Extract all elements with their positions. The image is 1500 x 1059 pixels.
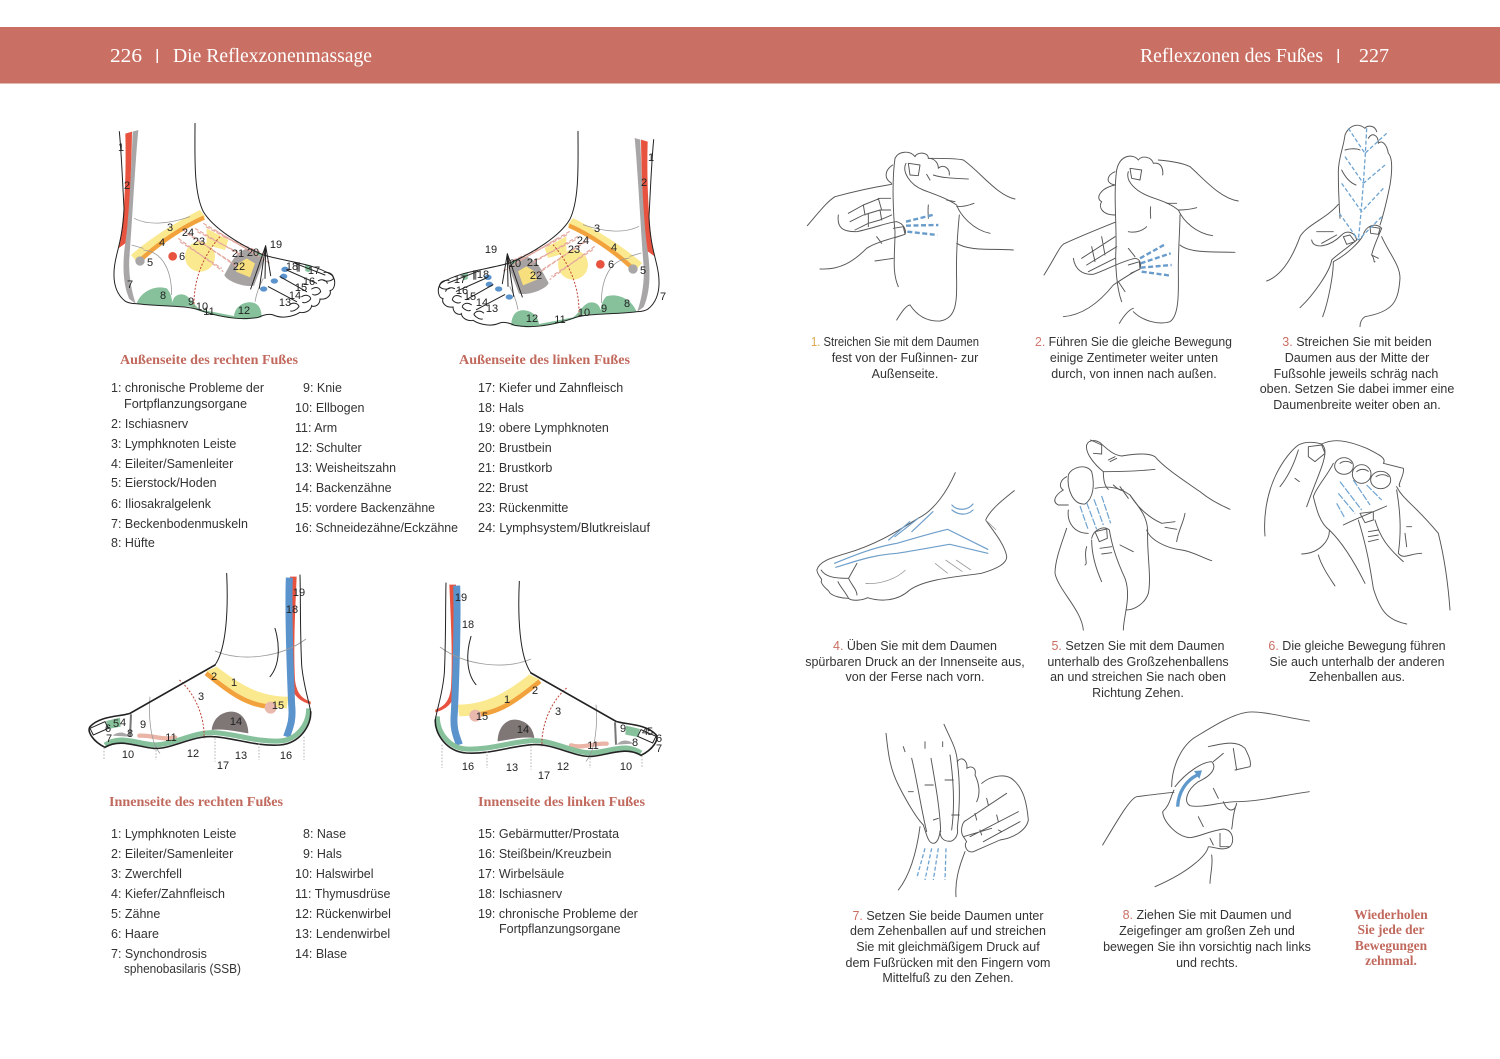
right page number: 227 [1359, 46, 1389, 67]
legend column 1, inner side: 7: Synchondrosis [111, 947, 207, 961]
legend column 1, inner side: 5: Zähne [111, 907, 160, 921]
legend column 3, outer side: 19: obere Lymphknoten [478, 421, 609, 435]
caption step 5: an und streichen Sie nach oben [1050, 670, 1226, 684]
illustration: step 5 hands on sole [1055, 440, 1230, 630]
legend column 3, inner side: 19: chronische Probleme der [478, 907, 638, 921]
foot chart: outer side of left foot: 4 [611, 242, 617, 254]
foot chart: outer side of right foot [114, 123, 335, 319]
legend column 1, outer side: 4: Eileiter/Samenleiter [111, 457, 233, 471]
caption step 7: dem Fußrücken mit den Fingern vom [846, 956, 1050, 970]
legend column 3, inner side: Fortpflanzungsorgane [499, 922, 621, 936]
caption step 7: Sie mit gleichmäßigem Druck auf [856, 940, 1040, 954]
foot chart: outer side of right foot: 17 [308, 265, 320, 277]
legend column 3, inner side [478, 827, 638, 936]
foot chart: inner side of left foot: 11 [587, 740, 599, 752]
foot chart: inner side of right foot: 18 [286, 604, 298, 616]
foot chart: outer side of left foot: 16 [456, 285, 468, 297]
foot chart: inner side of right foot: 14 [230, 716, 242, 728]
caption step 6: Sie auch unterhalb der anderen [1269, 655, 1445, 669]
illustration: step 6 hands on toes [1265, 441, 1450, 624]
illustration: step 2 hands on sole [1044, 156, 1238, 323]
caption step 7: dem Zehenballen auf und streichen [850, 924, 1046, 938]
foot chart: inner side of right foot: 6 [105, 723, 111, 735]
header band [0, 27, 1500, 84]
caption step 8: 8. Ziehen Sie mit Daumen und [1123, 908, 1291, 922]
legend column 1, outer side: 7: Beckenbodenmuskeln [111, 517, 248, 531]
foot chart: inner side of left foot: 12 [557, 761, 569, 773]
left page number: 226 [110, 46, 142, 67]
foot chart: inner side of right foot: 16 [280, 750, 292, 762]
foot chart: outer side of left foot: 6 [608, 259, 614, 271]
caption step 5 [1047, 639, 1229, 700]
legend column 3, outer side: 18: Hals [478, 401, 524, 415]
foot chart: outer side of right foot: 23 [193, 236, 205, 248]
caption step 1: Außenseite. [872, 367, 938, 381]
foot chart: outer side of left foot: 11 [554, 314, 566, 326]
foot chart: outer side of right foot: 13 [279, 297, 291, 309]
foot chart: inner side of left foot: 9 [620, 723, 626, 735]
foot chart: inner side of left foot [435, 581, 662, 782]
legend column 1, inner side: sphenobasilaris (SSB) [124, 962, 241, 976]
legend column 2, inner side: 14: Blase [295, 947, 347, 961]
legend column 2, outer side: 11: Arm [295, 421, 337, 435]
caption step 6 [1268, 639, 1446, 684]
legend column 3, outer side: 24: Lymphsystem/Blutkreislauf [478, 521, 651, 535]
foot chart: outer side of left foot: 24 [577, 235, 589, 247]
legend column 3, inner side: 17: Wirbelsäule [478, 867, 564, 881]
callout: repeat ten times: Wiederholen [1354, 907, 1428, 922]
foot chart: outer side of right foot: 10 [196, 301, 208, 313]
legend column 1, outer side: 5: Eierstock/Hoden [111, 476, 217, 490]
legend column 2, outer side: 9: Knie [303, 381, 342, 395]
illustration: step 7 hands on top of foot [886, 724, 1028, 897]
foot chart: outer side of right foot: 7 [127, 279, 133, 291]
caption step 5: unterhalb des Großzehenballens [1047, 655, 1229, 669]
foot chart: inner side of right foot: 9 [140, 719, 146, 731]
foot chart: inner side of right foot: 10 [122, 749, 134, 761]
foot chart: outer side of left foot: 17 [454, 274, 466, 286]
caption step 3 [1260, 335, 1454, 412]
foot chart: inner side of right foot: 3 [198, 691, 204, 703]
foot chart: inner side of left foot: 4 [642, 726, 648, 738]
foot chart: outer side of right foot: 8 [160, 290, 166, 302]
foot chart: inner side of right foot: 2 [211, 671, 217, 683]
foot chart: inner side of left foot: 17 [538, 770, 550, 782]
foot chart: outer side of left foot: 2 [641, 177, 647, 189]
callout: repeat ten times [1354, 907, 1428, 968]
foot chart: outer side of right foot: 2 [124, 180, 130, 192]
caption step 2 [1035, 335, 1232, 381]
legend column 3, inner side: 16: Steißbein/Kreuzbein [478, 847, 611, 861]
caption step 4: von der Ferse nach vorn. [846, 670, 984, 684]
legend column 3, outer side: 17: Kiefer und Zahnfleisch [478, 381, 623, 395]
heading: inner side left foot: Innenseite des linken Fußes [478, 794, 645, 809]
caption step 3: Daumen aus der Mitte der [1285, 351, 1429, 365]
foot chart: outer side of left foot: 18 [477, 269, 489, 281]
legend column 2, inner side: 9: Hals [303, 847, 342, 861]
right chapter title: Reflexzonen des Fußes [1140, 46, 1323, 67]
foot chart: outer side of right foot: 14 [289, 290, 301, 302]
caption step 6: 6. Die gleiche Bewegung führen [1268, 639, 1446, 653]
legend column 2, inner side [295, 827, 391, 961]
caption step 3: oben. Setzen Sie dabei immer eine [1260, 382, 1454, 396]
foot chart: outer side of right foot: 11 [203, 306, 215, 318]
foot chart: inner side of left foot: 1 [504, 694, 510, 706]
foot chart: inner side of left foot: 18 [462, 619, 474, 631]
foot chart: outer side of left foot: 1 [648, 152, 654, 164]
foot chart: inner side of left foot: 13 [506, 762, 518, 774]
foot chart: outer side of right foot: 5 [147, 257, 153, 269]
foot chart: outer side of right foot: 3 [167, 222, 173, 234]
caption step 5: Richtung Zehen. [1092, 686, 1184, 700]
foot chart: outer side of left foot: 5 [640, 265, 646, 277]
foot chart: outer side of right foot: 22 [233, 261, 245, 273]
foot chart: outer side of left foot: 9 [601, 303, 607, 315]
foot chart: inner side of left foot: 3 [555, 706, 561, 718]
caption step 7: Mittelfuß zu den Zehen. [882, 971, 1014, 985]
illustration: step 3 hands on sole [1267, 125, 1400, 327]
foot chart: inner side of left foot: 6 [656, 733, 662, 745]
foot chart: inner side of left foot: 16 [462, 761, 474, 773]
caption step 4: 4. Üben Sie mit dem Daumen [833, 639, 997, 653]
caption step 3: 3. Streichen Sie mit beiden [1282, 335, 1432, 349]
legend column 1, inner side [111, 827, 241, 976]
foot chart: outer side of left foot [438, 131, 666, 327]
legend column 2, outer side [295, 381, 458, 535]
caption step 4 [805, 639, 1025, 684]
foot chart: outer side of right foot: 4 [159, 237, 165, 249]
foot chart: inner side of right foot: 7 [106, 733, 112, 745]
callout: repeat ten times: Sie jede der [1358, 922, 1425, 937]
foot chart: inner side of right foot: 12 [187, 748, 199, 760]
legend column 2, outer side: 12: Schulter [295, 441, 362, 455]
foot chart: outer side of right foot: 16 [303, 276, 315, 288]
foot chart: outer side of left foot: 20 [509, 258, 521, 270]
heading: inner side right foot: Innenseite des rechten Fußes [109, 794, 283, 809]
legend column 1, outer side: 3: Lymphknoten Leiste [111, 437, 236, 451]
legend column 1, outer side: 2: Ischiasnerv [111, 417, 189, 431]
foot chart: outer side of left foot: 3 [594, 223, 600, 235]
foot chart: outer side of left foot: 21 [527, 257, 539, 269]
foot chart: inner side of right foot: 5 [113, 718, 119, 730]
foot chart: inner side of left foot: 2 [532, 685, 538, 697]
foot chart: inner side of left foot: 7 [656, 743, 662, 755]
foot chart: outer side of right foot: 1 [118, 142, 124, 154]
foot chart: inner side of right foot: 19 [293, 587, 305, 599]
caption step 6: Zehenballen aus. [1309, 670, 1405, 684]
legend column 3, outer side: 23: Rückenmitte [478, 501, 568, 515]
legend column 2, outer side: 16: Schneidezähne/Eckzähne [295, 521, 458, 535]
foot chart: outer side of left foot: 23 [568, 244, 580, 256]
foot chart: inner side of left foot: 15 [476, 711, 488, 723]
foot chart: inner side of left foot: 10 [620, 761, 632, 773]
caption step 1: fest von der Fußinnen- zur [832, 351, 978, 365]
foot chart: outer side of right foot: 12 [238, 305, 250, 317]
foot chart: outer side of left foot: 8 [624, 298, 630, 310]
foot chart: inner side of left foot: 8 [632, 737, 638, 749]
caption step 7: 7. Setzen Sie beide Daumen unter [852, 909, 1044, 923]
foot chart: outer side of left foot: 12 [526, 313, 538, 325]
caption step 3: Daumenbreite weiter oben an. [1273, 398, 1441, 412]
foot chart: outer side of right foot: 21 [232, 248, 244, 260]
caption step 1 [811, 335, 979, 381]
foot chart: inner side of right foot: 17 [217, 760, 229, 772]
foot chart: inner side of right foot: 1 [231, 677, 237, 689]
foot chart: inner side of right foot: 8 [127, 728, 133, 740]
caption step 8: bewegen Sie ihn vorsichtig nach links [1103, 940, 1311, 954]
caption step 4: spürbaren Druck an der Innenseite aus, [805, 655, 1025, 669]
caption step 5: 5. Setzen Sie mit dem Daumen [1051, 639, 1225, 653]
foot chart: outer side of right foot: 19 [270, 239, 282, 251]
caption step 1: 1. Streichen Sie mit dem Daumen [811, 335, 979, 349]
legend column 3, inner side: 18: Ischiasnerv [478, 887, 563, 901]
foot chart: inner side of right foot: 11 [165, 732, 177, 744]
foot chart: outer side of left foot: 22 [530, 270, 542, 282]
legend column 2, inner side: 8: Nase [303, 827, 346, 841]
foot chart: inner side of left foot: 5 [647, 726, 653, 738]
legend column 2, outer side: 14: Backenzähne [295, 481, 392, 495]
foot chart: outer side of right foot: 6 [179, 251, 185, 263]
left chapter title: Die Reflexzonenmassage [173, 46, 372, 67]
foot chart: outer side of right foot: 20 [247, 247, 259, 259]
legend column 1, outer side: 1: chronische Probleme der [111, 381, 264, 395]
foot chart: inner side of right foot: 13 [235, 750, 247, 762]
foot chart: inner side of right foot: 15 [272, 700, 284, 712]
heading: outer side right foot: Außenseite des rechten Fußes [120, 352, 298, 367]
foot chart: outer side of right foot: 18 [286, 261, 298, 273]
legend column 2, outer side: 15: vordere Backenzähne [295, 501, 435, 515]
legend column 2, inner side: 10: Halswirbel [295, 867, 374, 881]
illustration: step 8 fingers on big toe [1103, 712, 1309, 887]
foot chart: outer side of left foot: 14 [476, 297, 488, 309]
caption step 8: und rechts. [1176, 956, 1238, 970]
legend column 2, inner side: 12: Rückenwirbel [295, 907, 391, 921]
heading: outer side left foot: Außenseite des linken Fußes [459, 352, 630, 367]
legend column 3, outer side: 22: Brust [478, 481, 529, 495]
foot chart: outer side of left foot: 13 [486, 303, 498, 315]
caption step 3: Fußsohle jeweils schräg nach [1274, 367, 1438, 381]
callout: repeat ten times: Bewegungen [1355, 938, 1428, 953]
legend column 1, inner side: 4: Kiefer/Zahnfleisch [111, 887, 225, 901]
legend column 2, inner side: 13: Lendenwirbel [295, 927, 390, 941]
foot chart: outer side of right foot: 9 [188, 296, 194, 308]
illustration: step 1 hands on sole [807, 152, 1015, 321]
foot chart: inner side of right foot [89, 573, 311, 772]
caption step 8: Zeigefinger am großen Zeh und [1119, 924, 1295, 938]
legend column 1, outer side: 8: Hüfte [111, 536, 155, 550]
caption step 2: einige Zentimeter weiter unten [1050, 351, 1218, 365]
foot chart: outer side of left foot: 10 [578, 307, 590, 319]
legend column 3, outer side: 20: Brustbein [478, 441, 552, 455]
foot chart: outer side of left foot: 7 [660, 291, 666, 303]
foot chart: outer side of right foot: 15 [295, 282, 307, 294]
legend column 1, inner side: 3: Zwerchfell [111, 867, 182, 881]
legend column 1, inner side: 6: Haare [111, 927, 159, 941]
legend column 3, outer side: 21: Brustkorb [478, 461, 552, 475]
legend column 3, outer side [478, 381, 651, 535]
foot chart: outer side of left foot: 15 [464, 291, 476, 303]
legend column 1, inner side: 2: Eileiter/Samenleiter [111, 847, 233, 861]
legend column 2, outer side: 10: Ellbogen [295, 401, 365, 415]
legend column 2, inner side: 11: Thymusdrüse [295, 887, 390, 901]
legend column 1, outer side: Fortpflanzungsorgane [124, 397, 247, 411]
foot chart: inner side of right foot: 4 [120, 717, 126, 729]
legend column 2, outer side: 13: Weisheitszahn [295, 461, 396, 475]
legend column 1, outer side [111, 381, 264, 550]
legend column 3, inner side: 15: Gebärmutter/Prostata [478, 827, 619, 841]
callout: repeat ten times: zehnmal. [1365, 953, 1417, 968]
foot chart: inner side of left foot: 19 [455, 592, 467, 604]
foot chart: inner side of left foot: 14 [517, 724, 529, 736]
foot chart: outer side of left foot: 19 [485, 244, 497, 256]
caption step 8 [1103, 908, 1311, 970]
caption step 2: durch, von innen nach außen. [1051, 367, 1217, 381]
legend column 1, outer side: 6: Iliosakralgelenk [111, 497, 212, 511]
caption step 2: 2. Führen Sie die gleiche Bewegung [1035, 335, 1232, 349]
illustration: step 4 foot side view [817, 473, 1014, 600]
legend column 1, inner side: 1: Lymphknoten Leiste [111, 827, 236, 841]
caption step 7 [846, 909, 1050, 985]
foot chart: outer side of right foot: 24 [182, 227, 194, 239]
